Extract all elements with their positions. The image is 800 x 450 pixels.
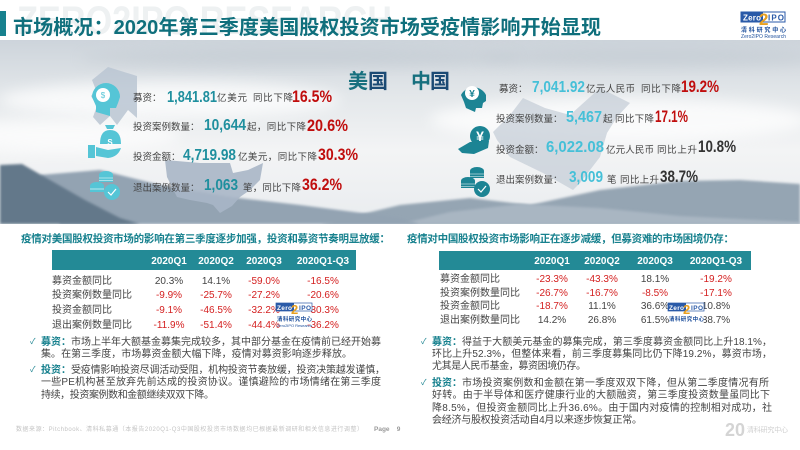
table: US: -9.9%	[156, 290, 182, 301]
table: China: -43.3%	[586, 274, 618, 285]
map: China	[493, 88, 630, 190]
table: US: 14.1%	[202, 276, 230, 287]
text block: China fundraising: 环比上升52.3%，但整体来看，前三季度募集同比仍下降19.2%，募资市场，	[432, 347, 772, 360]
row: China fundraising	[499, 78, 719, 96]
logo overlay on US table: IPO	[299, 305, 311, 312]
icon: head with dollar (US)	[92, 83, 120, 116]
icon: head with yuan (China): ¥	[469, 89, 475, 100]
text block: US investment: ✓	[30, 365, 36, 374]
table: China	[439, 251, 751, 326]
table: US: 20.3%	[155, 276, 183, 287]
table: US: -46.5%	[200, 305, 232, 316]
table: US: 投资案例数量同比	[52, 288, 132, 301]
logo overlay on US table: Zero	[277, 305, 292, 312]
row: China fundraising: 亿元人民币	[586, 83, 635, 95]
table: China: -18.7%	[536, 301, 568, 312]
table: China: 10.8%	[702, 301, 730, 312]
table: China: 投资金额同比	[440, 299, 500, 312]
row: China investment: 亿元人民币	[606, 144, 654, 156]
footer: 20 anniversary logo: 清科研究中心	[747, 425, 788, 434]
table: US: -51.4%	[200, 320, 232, 331]
table: US: -32.2%	[248, 305, 280, 316]
table: China: 2020Q3	[637, 256, 673, 267]
row: US exits: 1,063	[204, 177, 238, 194]
row: China fundraising: 募资：	[499, 83, 528, 95]
title: 市场概况：2020年第三季度美国股权投资市场受疫情影响开始显现	[13, 15, 601, 39]
table: US: -44.4%	[248, 320, 280, 331]
text block: China investment	[421, 376, 772, 426]
text block: China fundraising: 募资：	[432, 335, 462, 348]
icon: hand with yuan (China): ¥	[476, 128, 484, 144]
table: US: -30.3%	[307, 305, 339, 316]
heading: US impact: 疫情对美国股权投资市场的影响在第三季度逐步加强，投资和募资节奏明显放缓：	[21, 232, 390, 245]
table: US: -36.2%	[307, 320, 339, 331]
table: US: 2020Q2	[198, 256, 234, 267]
logo overlay on US table: 2	[291, 302, 298, 317]
row: China exits: 退出案例数量：	[496, 174, 563, 186]
icon: hand with money bag (US): S	[107, 138, 113, 147]
row: US fundraising	[133, 88, 332, 106]
text block: China investment: 降8.5%，但投资金额同比上升36.6%。由于国内对疫情的控制相对成功，社	[432, 401, 772, 414]
text block: US fundraising: 募资：	[41, 335, 71, 348]
icon: coins and check (US)	[90, 171, 120, 200]
table: China: 61.5%	[641, 315, 669, 326]
logo overlay on China table: 2	[683, 302, 690, 317]
table: US: -9.1%	[156, 305, 182, 316]
logo overlay on US table	[276, 302, 312, 328]
row: China exits	[496, 168, 698, 186]
text block: US investment: 持续，投资案例数和金额继续双双下降。	[41, 388, 214, 401]
row: US investment: 4,719.98	[183, 147, 236, 164]
text block: US fundraising: 集。在第三季度，市场募资金额大幅下降，疫情对募资影响逐步释放。	[41, 347, 352, 360]
footer: page number: Page 9	[374, 426, 401, 433]
icon: hand with yuan (China)	[458, 126, 490, 154]
logo: Zero2IPO: 2	[759, 10, 768, 29]
table: China: 36.6%	[641, 301, 669, 312]
table: China: 38.7%	[702, 315, 730, 326]
row: US exits	[133, 176, 342, 194]
logo: Zero2IPO: IPO	[768, 14, 784, 22]
text block: US fundraising	[30, 335, 381, 360]
table: US: 投资金额同比	[52, 303, 112, 316]
row: China fundraising: 7,041.92	[532, 79, 585, 96]
map: continental USA	[165, 160, 263, 213]
row: China investment: 10.8%	[698, 138, 736, 156]
text block: China investment: 市场投资案例数和金额在第一季度双双下降，但从第二季度情况有所	[462, 376, 769, 389]
row: China exits: 3,009	[569, 169, 603, 186]
table: US: -11.9%	[154, 320, 185, 331]
row: US fundraising: 募资：	[133, 92, 162, 104]
text block: China investment: 会经济与股权投资活动自4月以来逐步恢复正常。	[432, 413, 642, 426]
row: China exits: 同比上升	[620, 174, 659, 186]
table: China: 投资案例数量同比	[440, 286, 520, 299]
icon: head with yuan (China)	[461, 86, 486, 112]
row: US investment	[133, 146, 358, 164]
row: US deals: 10,644	[204, 117, 246, 134]
table: US: 2020Q1-Q3	[297, 256, 350, 267]
table: China: -16.7%	[586, 288, 618, 299]
row: US exits: 退出案例数量：	[133, 182, 200, 194]
text block: China fundraising: 得益于大额美元基金的募集完成，第三季度募资金额同比上升18.1%，	[462, 335, 772, 348]
row: US investment: 亿美元，同比下降	[238, 151, 317, 163]
row: China deals: 投资案例数量：	[496, 113, 563, 125]
row: US investment: 投资金额：	[133, 151, 181, 163]
watermark text: ZERO2IPO RESEARCH	[17, 0, 392, 43]
table: US	[52, 250, 356, 331]
icon: coins and check (China)	[461, 167, 490, 197]
row: US deals	[133, 117, 348, 135]
table: China: 18.1%	[641, 274, 669, 285]
row: China exits: 38.7%	[660, 168, 698, 186]
icon: hand with money bag (US)	[88, 125, 121, 158]
icon: head with dollar (US): $	[101, 91, 106, 100]
table: China: 14.2%	[538, 315, 566, 326]
text block: China fundraising	[421, 335, 772, 372]
row: US deals: 投资案例数量：	[133, 121, 200, 133]
row: US exits: 36.2%	[302, 176, 342, 194]
logo: Zero2IPO	[741, 10, 786, 40]
footer: 20 anniversary logo	[725, 420, 788, 440]
row: China investment	[496, 138, 736, 156]
row: China deals: 17.1%	[655, 108, 688, 126]
table: US: 退出案例数量同比	[52, 318, 132, 331]
text block: US investment	[30, 363, 385, 401]
table: China: -23.3%	[536, 274, 568, 285]
logo overlay on China table	[668, 302, 704, 323]
table: China: 2020Q1	[534, 256, 570, 267]
text block: China investment: ✓	[421, 378, 427, 387]
row: China investment: 同比上升	[657, 144, 697, 156]
text block: US fundraising: ✓	[30, 337, 36, 346]
table: US: 募资金额同比	[52, 274, 112, 287]
table: China: 2020Q2	[584, 256, 620, 267]
row: US exits: 笔，同比下降	[243, 182, 301, 194]
row: US deals: 起，同比下降	[247, 121, 306, 133]
logo overlay on US table: 清科研究中心	[277, 315, 312, 323]
logo overlay on China table: IPO	[691, 305, 703, 312]
table: China: 募资金额同比	[440, 272, 500, 285]
text block: US fundraising: 市场上半年大额基金募集完成较多，其中部分基金在疫情前已经开始募	[71, 335, 381, 348]
row: US deals: 20.6%	[307, 117, 348, 135]
table: US: -25.7%	[200, 290, 232, 301]
table: US: -20.6%	[307, 290, 339, 301]
row: US fundraising: 1,841.81	[167, 89, 217, 106]
row: China investment: 6,022.08	[546, 139, 604, 156]
row: China deals: 同比下降	[615, 113, 654, 125]
row: China deals: 起	[603, 114, 613, 125]
title bar marker	[0, 11, 6, 36]
text block: China fundraising: 尤其是人民币基金，募资困境仍存。	[432, 359, 586, 372]
text block: China fundraising: ✓	[421, 337, 427, 346]
row: China fundraising: 同比下降	[641, 83, 681, 95]
row: US investment: 30.3%	[318, 146, 358, 164]
table: China: 26.8%	[588, 315, 616, 326]
text block: China investment: 投资：	[432, 376, 462, 389]
table: China: 2020Q1-Q3	[690, 256, 743, 267]
hero background: sky and mountains	[0, 40, 800, 224]
row: US fundraising: 16.5%	[292, 88, 332, 106]
table: US: 2020Q1	[151, 256, 187, 267]
row: China exits: 笔	[607, 174, 617, 186]
row: China deals	[496, 108, 688, 126]
footer: data source: 数据来源：Pitchbook、清科私募通（本报告2020Q1-Q3中国股权投资市场数据均已根据最新调研和相关信息进行调整）	[16, 425, 363, 433]
map: Alaska	[91, 67, 137, 125]
logo: Zero2IPO: Zero	[743, 14, 761, 22]
table: China: 退出案例数量同比	[440, 313, 520, 326]
table: China: -8.5%	[642, 288, 668, 299]
row: US fundraising: 亿美元	[217, 92, 247, 104]
logo overlay on US table: Zero2IPO Research	[277, 323, 312, 328]
table: US: -16.5%	[307, 276, 339, 287]
table: China: -17.1%	[700, 288, 732, 299]
row: China fundraising: 19.2%	[681, 78, 719, 96]
table: China: 11.1%	[588, 301, 616, 312]
heading: China impact: 疫情对中国股权投资市场影响正在逐步减缓，但募资难的市场困境仍存：	[407, 232, 734, 245]
text block: US investment: 一些PE机构甚至放弃先前达成的投资协议。谨慎避险的市场情绪在第三季度	[41, 375, 381, 388]
row: China investment: 投资金额：	[496, 144, 544, 156]
text block: US investment: 投资：	[41, 363, 71, 376]
logo: Zero2IPO: 清科研究中心	[741, 26, 786, 34]
row: China deals: 5,467	[566, 109, 602, 126]
heading: 中国: 中国	[411, 70, 450, 93]
table: China: -26.7%	[536, 288, 568, 299]
text block: US investment: 受疫情影响投资尽调活动受阻，机构投资节奏放缓，投资决策越发谨慎，	[71, 363, 385, 376]
table: US: -27.2%	[248, 290, 280, 301]
logo overlay on China table: Zero	[669, 305, 684, 312]
row: US fundraising: 同比下降	[253, 92, 293, 104]
logo: Zero2IPO: Zero2IPO Research	[741, 34, 786, 40]
table: US: 2020Q3	[246, 256, 282, 267]
logo overlay on China table: 清科研究中心	[669, 315, 704, 323]
text block: China investment: 好转。由于半导体和医疗健康行业的大额融资，第三季度投资数量虽同比下	[432, 388, 770, 401]
table: US: -59.0%	[248, 276, 280, 287]
table: China: -19.2%	[700, 274, 732, 285]
heading: 美国: 美国	[348, 70, 388, 93]
footer: 20 anniversary logo: 20	[725, 420, 745, 440]
